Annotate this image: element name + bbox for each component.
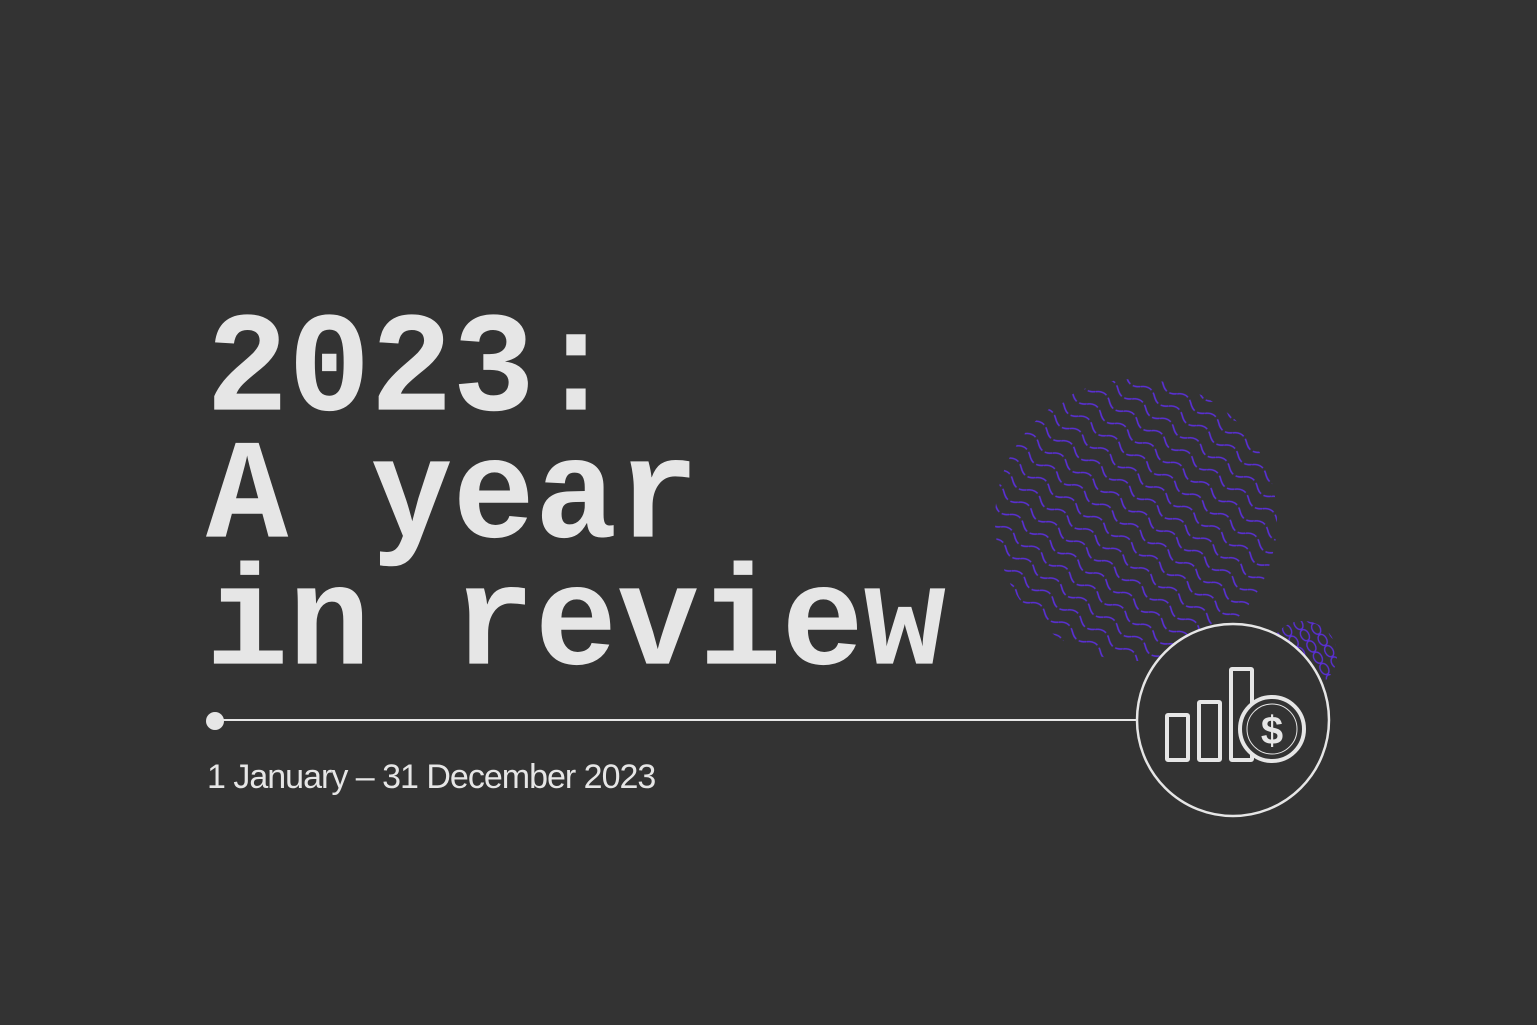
timeline line with dot <box>206 712 1137 730</box>
date range: 1 January – 31 December 2023 <box>207 758 655 796</box>
small purple dotted circle <box>1269 621 1337 689</box>
wavy purple circle <box>995 379 1277 661</box>
title line 2: A year <box>206 419 699 580</box>
title <box>206 292 946 707</box>
icon: bar chart with dollar in circle <box>1137 624 1329 816</box>
icon: bar chart with dollar in circle: $ <box>1261 709 1283 753</box>
title line 1: 2023: <box>206 292 617 453</box>
title line 3: in review <box>206 546 946 707</box>
